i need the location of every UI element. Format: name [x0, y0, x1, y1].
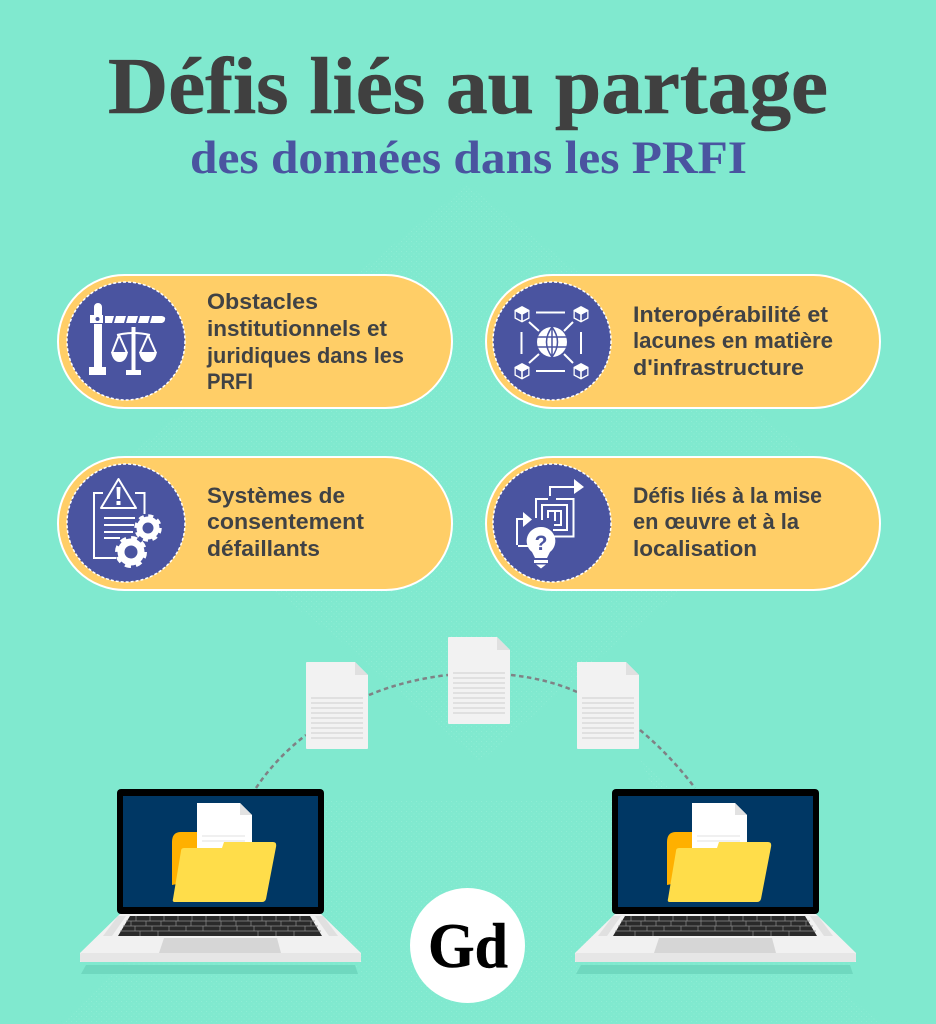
panel: failing consent systems [58, 457, 452, 590]
text: implementation: en œuvre et à la [633, 509, 800, 534]
text: implementation [633, 483, 822, 561]
text: consent systems: défaillants [207, 536, 320, 561]
icon: maze, arrows and bulb: ? [535, 532, 547, 555]
text: consent systems: consentement [207, 509, 365, 534]
text: obstacles: institutionnels et [207, 316, 388, 341]
text: obstacles: juridiques dans les [206, 343, 404, 368]
panel: interoperability and infrastructure [486, 275, 880, 408]
document right [577, 662, 639, 749]
title: Défis liés au partage [108, 43, 828, 131]
text: obstacles: PRFI [207, 369, 253, 394]
logo [410, 888, 525, 1003]
text: interoperability: d'infrastructure [633, 355, 804, 380]
laptop left with folder [80, 789, 361, 974]
dashed transfer arc [256, 675, 695, 788]
text: interoperability [633, 302, 833, 380]
subtitle: des données dans les PRFI [190, 132, 747, 184]
text: obstacles [206, 289, 404, 394]
text: consent systems [207, 483, 365, 561]
text: implementation: localisation [633, 536, 757, 561]
document centre [448, 637, 510, 724]
text: interoperability: lacunes en matière [633, 328, 833, 353]
icon: network globe [493, 282, 611, 400]
logo: Gd [428, 910, 508, 981]
laptop right with folder [575, 789, 856, 974]
panel: implementation and localisation [486, 457, 880, 590]
document left [306, 662, 368, 749]
text: obstacles: Obstacles [207, 289, 318, 314]
icon: warning document with gears [67, 464, 185, 582]
panel: institutional and legal obstacles [58, 275, 452, 408]
text: implementation: Défis liés à la mise [633, 483, 822, 508]
text: consent systems: Systèmes de [207, 483, 345, 508]
icon: maze, arrows and bulb [493, 464, 611, 582]
icon: barrier and scales [67, 282, 185, 400]
text: interoperability: Interopérabilité et [633, 302, 829, 327]
